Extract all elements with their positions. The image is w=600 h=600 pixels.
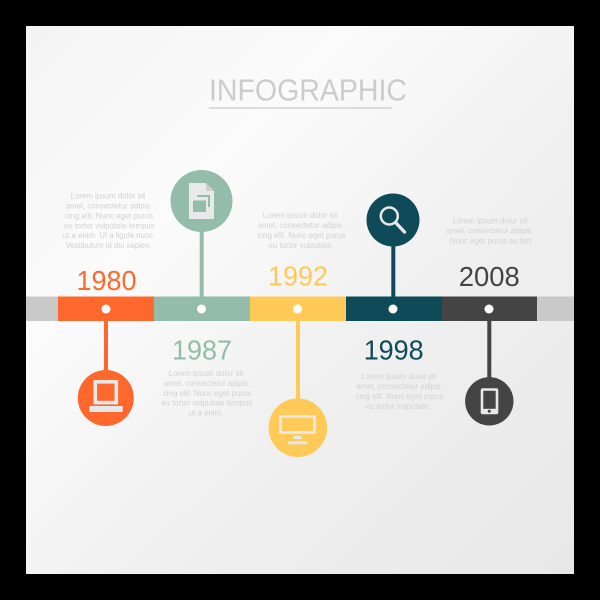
milestone 1987 (161, 170, 252, 418)
icon: magnifier (366, 194, 420, 246)
text: 1992 description: eu tortor vulputate. (268, 241, 334, 250)
text: 2008 description: Nunc eget purus eu tort (450, 236, 532, 246)
text: 1998 description (356, 372, 444, 411)
icon: smartphone (465, 377, 514, 425)
text: 1980 description: cing elit. Nunc eget purus (65, 211, 153, 220)
title: INFOGRAPHIC (209, 74, 407, 108)
text: 1998 description: cing elit. Nunc eget purus (356, 392, 444, 401)
year 1992: 1992 (268, 260, 328, 292)
text: 1980 description: eu tortor vulputate tempus (64, 221, 155, 230)
text: 2008 description (447, 216, 533, 246)
milestone 1980 (63, 192, 155, 426)
text: 2008 description: Lorem ipsum dolor sit (453, 216, 528, 226)
icon: desktop monitor (268, 398, 327, 457)
text: 1987 description (161, 369, 252, 418)
text: 1980 description (63, 192, 155, 250)
timeline bar (26, 296, 574, 321)
milestone 1998 (356, 194, 444, 411)
stem and dot 1980 (102, 304, 110, 373)
milestone 2008 (447, 216, 533, 425)
stem and dot 1987 (197, 231, 206, 314)
year 1987: 1987 (172, 335, 232, 366)
year 1998: 1998 (364, 335, 424, 366)
stem and dot 2008 (484, 304, 494, 379)
icon: laptop (78, 370, 134, 426)
icon: document (170, 170, 232, 232)
year 2008: 2008 (459, 261, 520, 292)
text: 1998 description: amet, consectetur adipis (356, 382, 441, 391)
text: 1987 description: eu tortor vulputate tempus (161, 399, 252, 408)
stem and dot 1992 (293, 304, 302, 401)
text: 1980 description: amet, consectetur adipis (66, 202, 150, 210)
text: 1987 description: cing elit. Nunc eget purus (163, 389, 251, 398)
stem and dot 1998 (388, 246, 398, 314)
text: 1992 description: Lorem ipsum dolor sit (263, 211, 338, 220)
text: 1992 description (258, 211, 346, 250)
text: 1980 description: Lorem ipsum dolor sit (71, 192, 146, 200)
text: 1987 description: ut a enim. (189, 409, 223, 418)
milestone 1992 (258, 211, 346, 457)
text: 1987 description: amet, consectetur adipis (164, 379, 248, 388)
text: 1980 description: ut a enim. Ut a ligula nunc. (63, 231, 155, 240)
text: 1987 description: Lorem ipsum dolor sit (169, 369, 244, 378)
text: 1998 description: eu tortor vulputate. (365, 402, 431, 411)
year 1980: 1980 (76, 265, 136, 296)
text: 2008 description: amet, consectetur adipis. (447, 226, 533, 236)
text: 1992 description: cing elit. Nunc eget purus (258, 231, 346, 240)
text: 1998 description: Lorem ipsum dolor sit (361, 372, 437, 381)
text: 1992 description: amet, consectetur adipis (258, 221, 342, 230)
text: 1980 description: Vestibulum id dui sapien. (65, 241, 152, 250)
